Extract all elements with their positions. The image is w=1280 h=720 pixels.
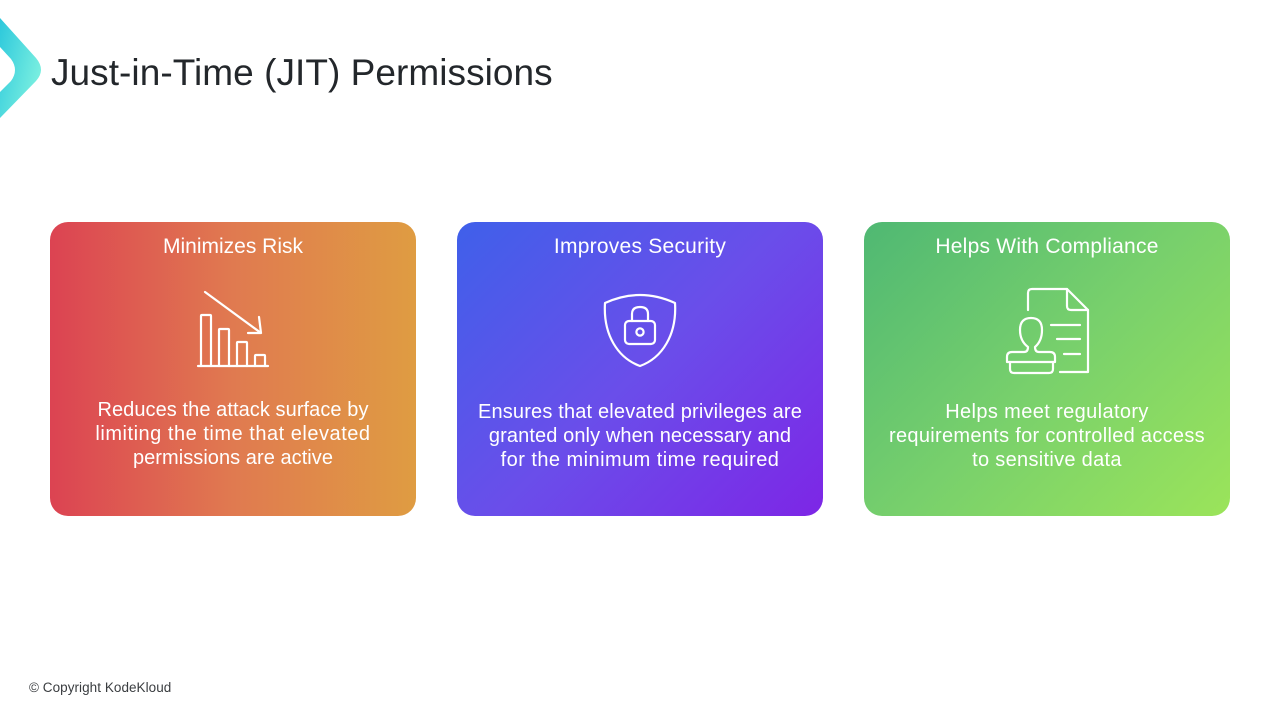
body text: improves security: for the minimum time required xyxy=(501,449,779,471)
copyright footer: © Copyright KodeKloud xyxy=(29,680,171,695)
body text: minimizes risk: permissions are active xyxy=(133,447,333,469)
body text: helps with compliance: requirements for controlled access xyxy=(889,425,1205,447)
title: Just-in-Time (JIT) Permissions xyxy=(51,52,553,93)
body text: helps with compliance: to sensitive data xyxy=(972,449,1122,471)
body text: minimizes risk xyxy=(95,399,371,469)
panel: helps with compliance xyxy=(864,222,1230,516)
panel: improves security xyxy=(457,222,823,516)
heading: minimizes risk: Minimizes Risk xyxy=(163,235,303,258)
heading: helps with compliance: Helps With Compliance xyxy=(935,235,1159,258)
logo chevron xyxy=(0,18,41,118)
body text: improves security: Ensures that elevated privileges are xyxy=(478,401,802,423)
heading: improves security: Improves Security xyxy=(554,235,726,258)
icon: shield with padlock xyxy=(604,294,676,368)
panel: minimizes risk xyxy=(50,222,416,516)
body text: helps with compliance: Helps meet regulatory xyxy=(945,401,1149,423)
icon: declining bar chart xyxy=(196,290,270,368)
body text: improves security: granted only when necessary and xyxy=(489,425,791,447)
body text: minimizes risk: limiting the time that elevated xyxy=(95,423,371,445)
body text: improves security xyxy=(478,401,802,471)
icon: document with stamp xyxy=(1006,288,1090,374)
body text: helps with compliance xyxy=(889,401,1205,471)
body text: minimizes risk: Reduces the attack surface by xyxy=(97,399,369,421)
